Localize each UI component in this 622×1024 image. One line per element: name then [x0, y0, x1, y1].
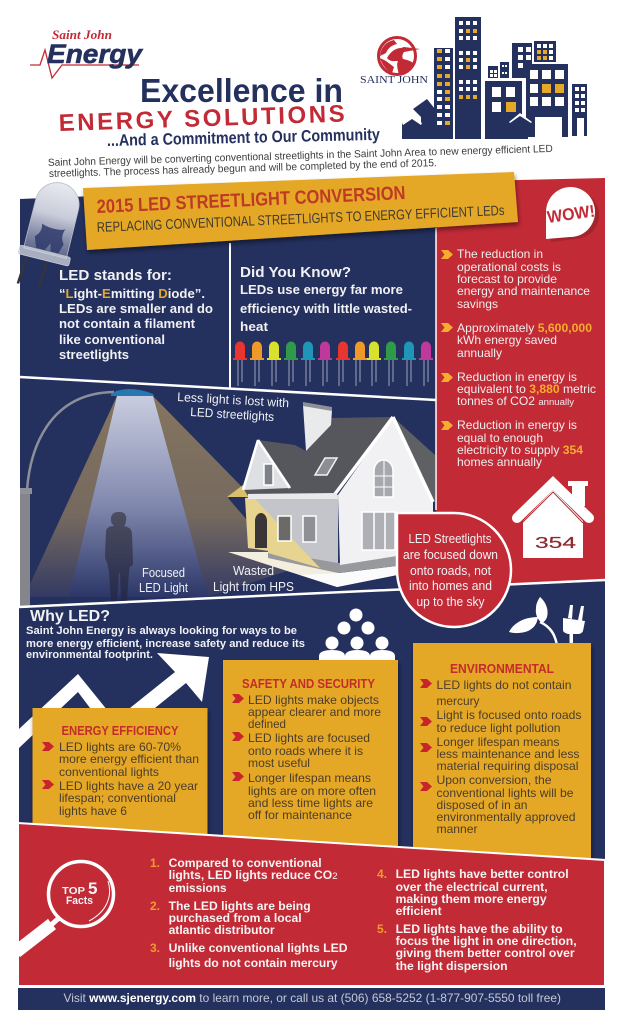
card: environmental: disposed of in an: [436, 798, 528, 812]
label: focused LED light: LED Light: [139, 581, 188, 595]
text block: kWh saved: Approximately 5,600,000: [457, 321, 592, 335]
text block: homes supplied: Reduction in energy is: [457, 418, 577, 432]
card: environmental: manner: [436, 822, 478, 836]
card: safety and security: off for maintenance: [248, 808, 352, 822]
icon: clear LED bulb: [11, 177, 88, 295]
divider line: [19, 580, 605, 607]
list: facts 1 to 3: emissions: [169, 881, 227, 895]
list: facts 4 and 5: 5.: [377, 922, 387, 936]
card: environmental: mercury: [436, 694, 480, 708]
card: environmental: Longer lifespan means: [436, 735, 560, 749]
list: facts 1 to 3: lights, LED lights reduce CO2: [169, 868, 338, 882]
title: [58, 72, 381, 150]
icon: magnifying glass: 5: [88, 879, 98, 898]
card: safety and security: SAFETY AND SECURITY: [242, 676, 375, 691]
banner: 2015 LED streetlight conversion: [83, 172, 518, 250]
footer: Visit www.sjenergy.com to learn more, or call us at (506) 658-5252 (1-877-907-5550 toll free): [64, 991, 561, 1005]
list: facts 1 to 3: [150, 856, 348, 970]
text block: did you know: Did You Know?: [240, 264, 351, 281]
text block: CO2 reduction: Reduction in energy is: [457, 370, 577, 384]
panel: navy upper background: [20, 182, 436, 607]
logo: Saint John Energy: [30, 28, 144, 78]
list: facts 4 and 5: giving them better control over: [396, 946, 575, 960]
card: safety and security: LED lights make objects: [248, 693, 379, 707]
card: energy efficiency: [32, 708, 208, 840]
icon: house 354: [517, 481, 589, 558]
card: energy efficiency: more energy efficient than: [59, 752, 199, 766]
text block: CO2 reduction: tonnes of CO2 annually: [457, 394, 574, 408]
list: facts 1 to 3: 3.: [150, 941, 160, 955]
banner: 2015 LED streetlight conversion: REPLACING CONVENTIONAL STREETLIGHTS TO ENERGY EFFICIENT LEDs: [96, 202, 505, 235]
card: energy efficiency: lights have 6: [59, 804, 127, 818]
icon: city skyline: [402, 17, 587, 139]
icon: row of coloured LEDs: [233, 342, 433, 386]
text block: cost savings: forecast to provide: [457, 272, 557, 286]
intro text: [48, 143, 553, 180]
list: facts 1 to 3: Unlike conventional lights LED: [169, 941, 348, 955]
list: facts 1 to 3: The LED lights are being: [169, 899, 311, 913]
icon: people group: [319, 608, 395, 662]
label: wasted light from HPS: Light from HPS: [213, 580, 294, 594]
text block: cost savings: savings: [457, 297, 498, 311]
text block: LED stands for: “Light-Emitting Diode”.: [59, 286, 205, 301]
text block: LED stands for: not contain a filament: [59, 316, 196, 331]
icon: person silhouette: [105, 512, 133, 603]
title: ENERGY SOLUTIONS: [58, 101, 345, 137]
text block: cost savings: [441, 247, 590, 311]
title: ...And a Commitment to Our Community: [107, 126, 381, 150]
list: facts 4 and 5: LED lights have better control: [396, 867, 569, 881]
text block: cost savings: operational costs is: [457, 260, 561, 274]
card: safety and security: and less time lights are: [248, 796, 373, 810]
card: environmental: Light is focused onto roads: [436, 708, 582, 722]
card: safety and security: onto roads where it is: [248, 744, 363, 758]
card: environmental: material requiring disposal: [436, 759, 578, 773]
list: facts 4 and 5: making them more energy: [396, 892, 547, 906]
heading: why LED: more energy efficient, increase safety and reduce its: [26, 638, 305, 650]
banner: 2015 LED streetlight conversion: 2015 LED STREETLIGHT CONVERSION: [96, 183, 406, 218]
card: environmental: LED lights do not contain: [436, 678, 572, 692]
icon: magnifying glass: Facts: [66, 895, 93, 907]
icon: house 354: 354: [535, 535, 577, 552]
label: less light lost: [177, 390, 289, 424]
text block: did you know: [240, 264, 412, 334]
list: facts 4 and 5: the light dispersion: [396, 959, 508, 973]
text block: did you know: heat: [240, 319, 269, 334]
list: facts 4 and 5: 4.: [377, 867, 387, 881]
logo: City of Saint John: [360, 38, 428, 86]
intro text: streetlights. The process has already begun and will be completed by the end of 2015.: [49, 157, 437, 180]
panel: street scene: [20, 389, 435, 606]
card: energy efficiency: LED lights are 60-70%: [59, 740, 181, 754]
text block: homes supplied: equal to enough: [457, 431, 543, 445]
card: environmental: ENVIRONMENTAL: [450, 661, 554, 676]
text block: kWh saved: kWh energy saved: [457, 333, 557, 347]
text block: cost savings: The reduction in: [457, 247, 543, 261]
card: environmental: [413, 643, 591, 865]
list: facts 4 and 5: over the electrical current,: [396, 880, 548, 894]
text block: homes supplied: [441, 418, 583, 469]
list: facts 1 to 3: purchased from a local: [169, 911, 302, 925]
text block: CO2 reduction: [441, 370, 596, 408]
text block: kWh saved: annually: [457, 346, 502, 360]
label: wasted light from HPS: [213, 564, 294, 594]
illustration: house: [227, 402, 435, 587]
callout: LED streetlights focused: into homes and: [409, 579, 492, 593]
light cone: wasted HPS: [30, 396, 290, 597]
callout: LED streetlights focused: onto roads, not: [410, 564, 491, 578]
logo: Saint John Energy: Saint John: [52, 28, 112, 42]
callout: WOW bubble: [546, 187, 599, 242]
card: safety and security: lights are on more often: [248, 784, 376, 798]
intro text: Saint John Energy will be converting conventional streetlights in the Saint John Area to new energy efficient LED: [48, 143, 553, 169]
icon: magnifying glass: TOP: [62, 885, 85, 897]
text block: cost savings: energy and maintenance: [457, 284, 590, 298]
text block: CO2 reduction: equivalent to 3,880 metric: [457, 382, 596, 396]
panel: why LED background: [19, 581, 605, 862]
card: safety and security: appear clearer and more: [248, 705, 381, 719]
text block: LED stands for: LED stands for:: [59, 267, 172, 284]
heading: why LED: environmental footprint.: [26, 649, 153, 661]
title: Excellence in: [140, 72, 343, 109]
label: focused LED light: Focused: [142, 566, 185, 580]
label: less light lost: LED streetlights: [190, 405, 275, 424]
card: environmental: Upon conversion, the: [436, 773, 552, 787]
callout: LED streetlights focused: are focused down: [403, 548, 498, 562]
card: environmental: less maintenance and less: [436, 747, 580, 761]
card: environmental: to reduce light pollution: [436, 721, 560, 735]
card: safety and security: [223, 660, 398, 852]
card: environmental: environmentally approved: [436, 810, 576, 824]
list: facts 1 to 3: atlantic distributor: [169, 923, 275, 937]
label: focused LED light: [139, 566, 188, 595]
list: facts 4 and 5: [377, 867, 577, 973]
panel: top 5 facts: [16, 823, 605, 986]
light cone: focused LED: [69, 396, 208, 597]
card: environmental: conventional lights will be: [436, 786, 574, 800]
divider lines: [20, 228, 436, 510]
callout: WOW bubble: WOW!: [546, 201, 596, 227]
card: energy efficiency: conventional lights: [59, 765, 159, 779]
icon: street lamp: [20, 389, 154, 606]
list: facts 4 and 5: LED lights have the ability to: [396, 922, 563, 936]
panel: WOW facts: [436, 178, 605, 590]
callout: LED streetlights focused: LED Streetlights: [408, 532, 492, 546]
label: wasted light from HPS: Wasted: [233, 564, 274, 578]
logo: Saint John Energy: Energy: [47, 39, 144, 69]
heading: why LED: Saint John Energy is always looking for ways to be: [26, 625, 297, 637]
icon: leaf and plug: [509, 597, 585, 645]
list: facts 4 and 5: focus the light in one direction,: [396, 934, 577, 948]
footer: [18, 988, 605, 1010]
text block: homes supplied: electricity to supply 354: [457, 443, 583, 457]
card: energy efficiency: ENERGY EFFICIENCY: [62, 723, 179, 738]
callout: LED streetlights focused: [397, 513, 511, 627]
label: less light lost: Less light is lost with: [177, 390, 289, 410]
text block: did you know: efficiency with little wasted-: [240, 301, 412, 316]
text block: kWh saved: [441, 321, 592, 360]
text block: LED stands for: LEDs are smaller and do: [59, 301, 213, 316]
text block: homes supplied: homes annually: [457, 455, 542, 469]
heading: why LED: [26, 608, 305, 661]
text block: LED stands for: streetlights: [59, 347, 129, 362]
card: safety and security: defined: [248, 717, 286, 731]
logo: City of Saint John: SAINT JOHN: [360, 75, 428, 86]
heading: why LED: Why LED?: [30, 608, 110, 625]
list: facts 4 and 5: efficient: [396, 904, 442, 918]
card: safety and security: LED lights are focused: [248, 731, 370, 745]
card: energy efficiency: lifespan; conventional: [59, 791, 176, 805]
list: facts 1 to 3: Compared to conventional: [169, 856, 322, 870]
text block: LED stands for: [59, 267, 213, 362]
text block: LED stands for: like conventional: [59, 332, 165, 347]
icon: magnifying glass: [16, 862, 114, 952]
card: safety and security: most useful: [248, 756, 310, 770]
callout: LED streetlights focused: up to the sky: [416, 595, 485, 609]
arrow: rising zigzag: [19, 653, 209, 748]
text block: did you know: LEDs use energy far more: [240, 282, 403, 297]
list: facts 1 to 3: lights do not contain mercury: [169, 956, 338, 970]
card: energy efficiency: LED lights have a 20 year: [59, 779, 198, 793]
list: facts 1 to 3: 1.: [150, 856, 160, 870]
card: safety and security: Longer lifespan means: [248, 771, 371, 785]
list: facts 1 to 3: 2.: [150, 899, 160, 913]
